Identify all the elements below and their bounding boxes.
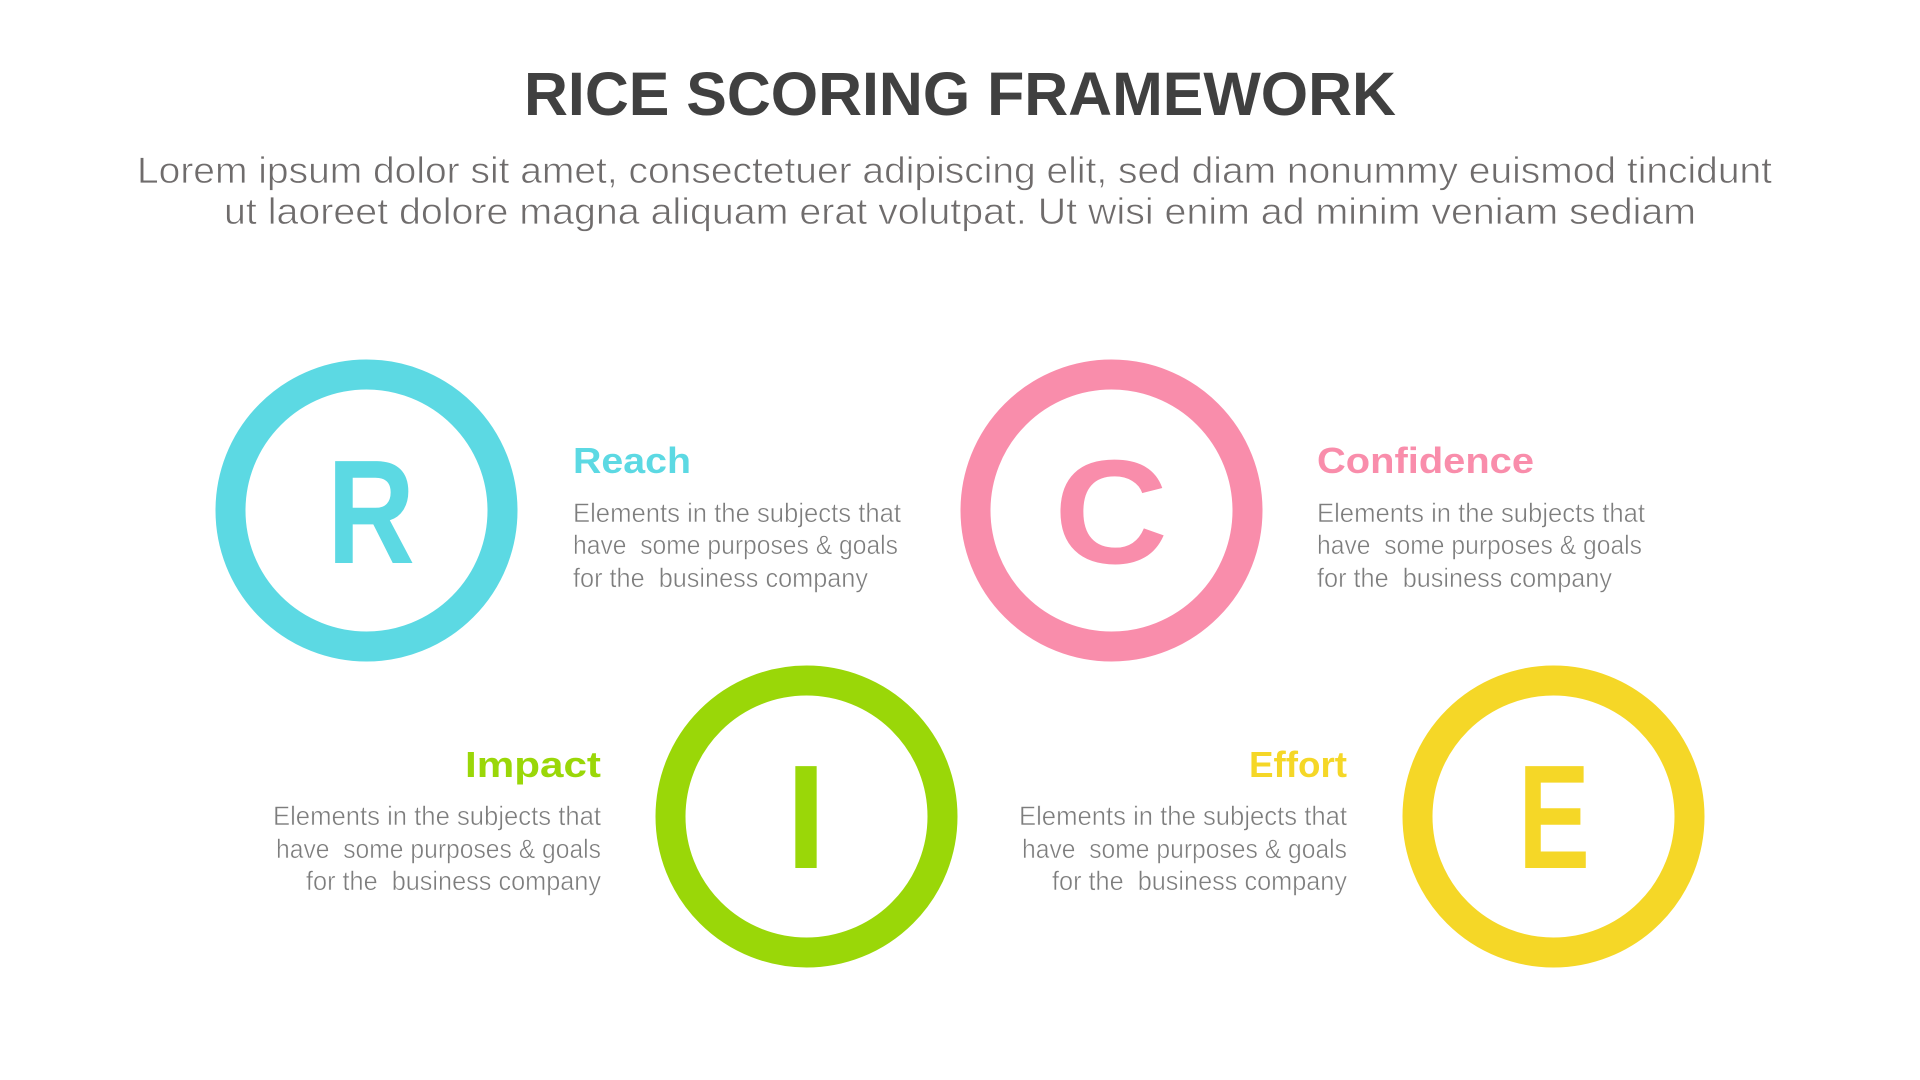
panel: effort [1019, 680, 1690, 952]
text block: impact description [273, 801, 601, 896]
icon: ring E: E [1518, 735, 1590, 900]
text block: effort description [1019, 801, 1347, 896]
text block: confidence description: Elements in the subjects that [1317, 498, 1645, 528]
text block: confidence description [1317, 498, 1645, 593]
text block: reach description: Elements in the subjects that [573, 498, 901, 528]
icon: ring R [230, 374, 502, 646]
heading: confidence: Confidence [1317, 440, 1534, 481]
heading: reach: Reach [573, 440, 691, 481]
subtitle text block: Lorem ipsum dolor sit amet, consectetuer adipiscing elit, sed diam nonummy euismod tincidunt [137, 150, 1773, 191]
heading: impact: Impact [465, 744, 601, 785]
icon: ring I: I [785, 735, 827, 900]
title: RICE SCORING FRAMEWORK [524, 60, 1396, 128]
text block: confidence description: for the business company [1317, 563, 1612, 593]
text block: effort description: for the business company [1052, 866, 1347, 896]
icon: ring E [1418, 680, 1690, 952]
icon: ring I [670, 680, 942, 952]
subtitle text block: ut laoreet dolore magna aliquam erat volutpat. Ut wisi enim ad minim veniam sediam [224, 191, 1696, 232]
text block: reach description: have some purposes & goals [573, 530, 898, 560]
text block: reach description: for the business company [573, 563, 868, 593]
heading: effort: Effort [1249, 744, 1347, 785]
subtitle text block [137, 150, 1773, 232]
text block: confidence description: have some purposes & goals [1317, 530, 1642, 560]
panel: reach [230, 374, 901, 646]
text block: impact description: for the business company [306, 866, 601, 896]
icon: ring C [976, 374, 1248, 646]
panel: impact [273, 680, 942, 952]
icon: ring R: R [327, 430, 415, 595]
text block: effort description: have some purposes & goals [1022, 834, 1347, 864]
text block: impact description: Elements in the subjects that [273, 801, 601, 831]
text block: effort description: Elements in the subjects that [1019, 801, 1347, 831]
icon: ring C: C [1054, 430, 1168, 595]
text block: impact description: have some purposes & goals [276, 834, 601, 864]
text block: reach description [573, 498, 901, 593]
panel: confidence [976, 374, 1645, 646]
